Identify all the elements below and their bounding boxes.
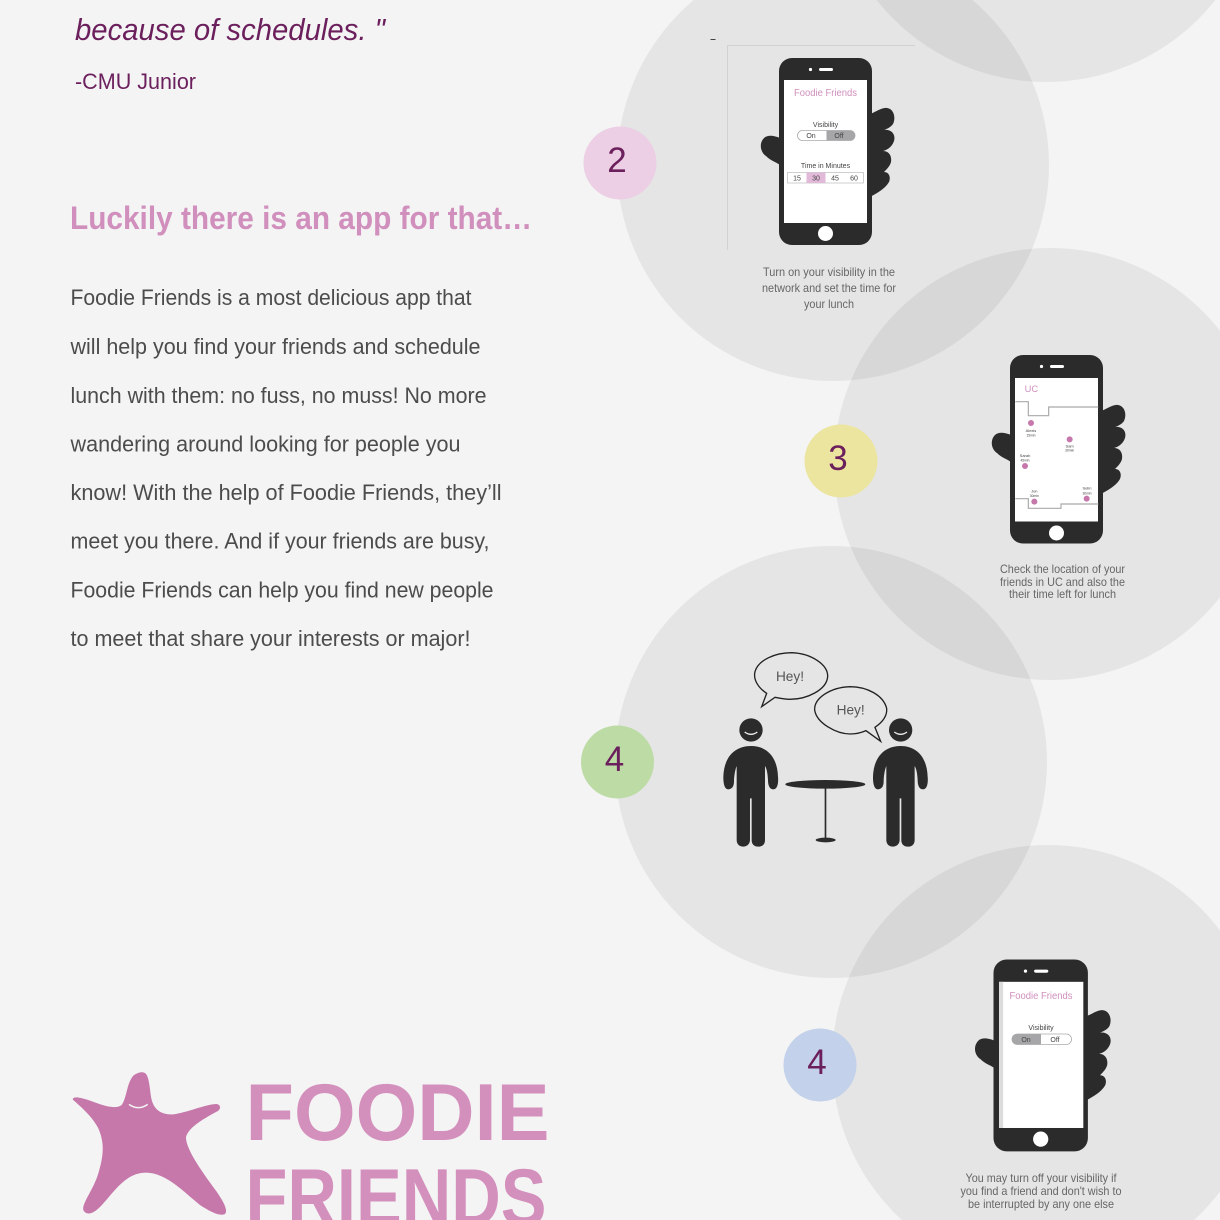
phone 2: map of friends in UC: UC [1025, 384, 1038, 394]
phone 2: map of friends in UC: 15min [1026, 433, 1036, 437]
body text: to meet that share your interests or major! [70, 626, 470, 651]
step badge 4 second: 4 [807, 1043, 827, 1082]
phone 1: visibility settings: 15 [793, 176, 801, 182]
caption: step 2 [762, 265, 896, 311]
phone 3: turning visibility off [975, 960, 1111, 1151]
caption: final step [960, 1171, 1122, 1211]
phone 2: map of friends in UC: 30min [1082, 491, 1092, 495]
body text: lunch with them: no fuss, no muss! No more [70, 383, 486, 408]
body text: know! With the help of Foodie Friends, they’ll [70, 480, 502, 505]
step badge 4 [581, 726, 654, 798]
step badge 2: 2 [607, 141, 627, 180]
caption: step 3: friends in UC and also the [1000, 575, 1125, 589]
step badge 3 [804, 424, 878, 498]
caption: step 2: Turn on your visibility in the [763, 265, 895, 279]
phone 1: visibility settings: Visibility [813, 122, 839, 129]
body text [70, 285, 501, 651]
phone 2: map of friends in UC: Selin [1083, 485, 1091, 490]
quote text: because of schedules. " [75, 12, 387, 47]
phone 3: turning visibility off: Off [1050, 1037, 1060, 1044]
phone 1: visibility settings: 45 [831, 176, 839, 182]
phone 1: visibility settings: On [806, 133, 816, 140]
caption: final step: You may turn off your visibility if [966, 1171, 1117, 1185]
phone 3: turning visibility off: Foodie Friends [1010, 991, 1072, 1002]
caption: step 3: their time left for lunch [1009, 587, 1116, 601]
body text: Foodie Friends can help you find new people [70, 578, 494, 602]
body text: wandering around looking for people you [70, 432, 460, 456]
phone 1: visibility settings: Time in Minutes [801, 163, 851, 170]
body text: will help you find your friends and schedule [70, 334, 480, 359]
body text: Foodie Friends is a most delicious app that [70, 285, 472, 310]
logo: wordmark: FOODIE [246, 1068, 550, 1158]
phone 1: visibility settings: 30 [812, 176, 820, 182]
phone 1: visibility settings: 60 [850, 176, 858, 182]
step badge 2 [584, 126, 656, 200]
caption: final step: be interrupted by any one else [968, 1197, 1114, 1211]
caption: step 2: your lunch [804, 297, 854, 311]
quote attribution: -CMU Junior [75, 69, 196, 94]
phone 3: turning visibility off: Visibility [1028, 1025, 1054, 1032]
caption: final step: you find a friend and don't wish to [960, 1184, 1122, 1198]
body text: meet you there. And if your friends are busy, [70, 528, 490, 554]
step badge 4 second [784, 1028, 856, 1102]
phone 2: map of friends in UC: 30min [1065, 449, 1074, 453]
phone 1: visibility settings [761, 58, 894, 245]
heading: Luckily there is an app for that… [70, 200, 532, 236]
illustration: two people meeting at a table [723, 653, 928, 847]
phone 2: map of friends in UC: Jon [1031, 488, 1038, 493]
phone 2: map of friends in UC: Sam [1066, 443, 1074, 448]
phone 3: turning visibility off: On [1021, 1037, 1031, 1044]
caption: step 3 [1000, 562, 1125, 601]
corner guide lines [710, 40, 915, 250]
background circles [615, 0, 1220, 1220]
illustration: two people meeting at a table: Hey! [837, 702, 865, 717]
logo: wordmark [246, 1068, 550, 1220]
phone 2: map of friends in UC: 30min [1030, 494, 1039, 498]
phone 2: map of friends in UC: 45min [1020, 458, 1030, 462]
caption: step 2: network and set the time for [762, 281, 896, 295]
phone 2: map of friends in UC: Sarah [1020, 453, 1030, 458]
phone 1: visibility settings: Off [834, 133, 844, 140]
illustration: two people meeting at a table: Hey! [776, 669, 804, 684]
phone 2: map of friends in UC [992, 355, 1125, 544]
phone 2: map of friends in UC: Alexis [1026, 428, 1036, 433]
caption: step 3: Check the location of your [1000, 562, 1125, 576]
phone 1: visibility settings: Foodie Friends [794, 88, 857, 99]
step badge 4: 4 [605, 740, 624, 779]
step badge 3: 3 [828, 439, 848, 478]
logo: star mascot [73, 1072, 226, 1215]
